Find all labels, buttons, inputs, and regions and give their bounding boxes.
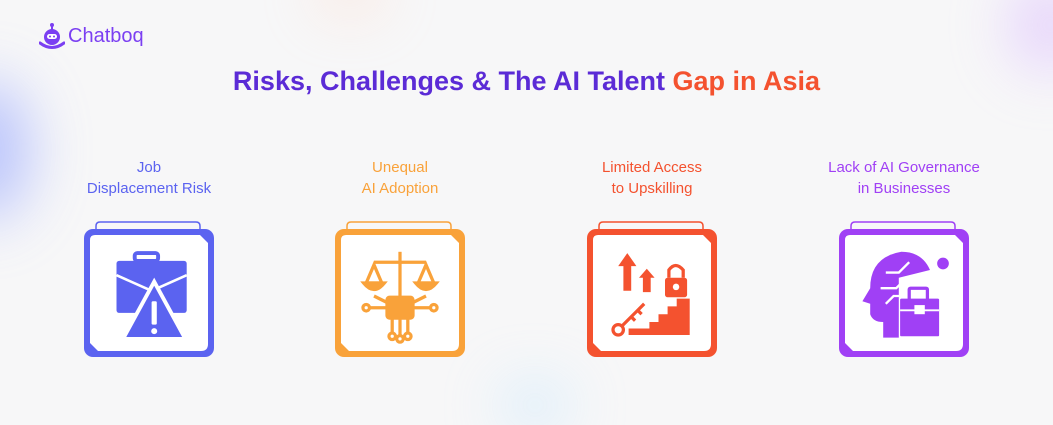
card 1 (84, 221, 214, 357)
icon: head with briefcase (862, 252, 949, 338)
icon: stairs arrows lock key (613, 253, 690, 335)
label 3: to Upskilling (612, 180, 692, 197)
label 1: Job (137, 159, 161, 176)
title: Risks, Challenges & The AI Talent Gap in Asia (233, 66, 820, 96)
label 2: AI Adoption (362, 180, 438, 197)
card 2 (335, 221, 465, 357)
icon: briefcase warning (116, 253, 187, 339)
card 3 (587, 221, 717, 357)
label 3 (602, 159, 702, 197)
logo: Chatboq (68, 25, 144, 47)
label 3: Limited Access (602, 159, 702, 176)
logo (39, 23, 144, 49)
label 2: Unequal (372, 159, 428, 176)
label 4: in Businesses (858, 180, 950, 197)
label 1 (87, 159, 212, 197)
label 4: Lack of AI Governance (828, 159, 980, 176)
label 1: Displacement Risk (87, 180, 211, 197)
card 4 (839, 221, 969, 357)
label 4 (828, 159, 980, 197)
icon: scales circuit (363, 252, 437, 342)
label 2 (362, 159, 438, 197)
